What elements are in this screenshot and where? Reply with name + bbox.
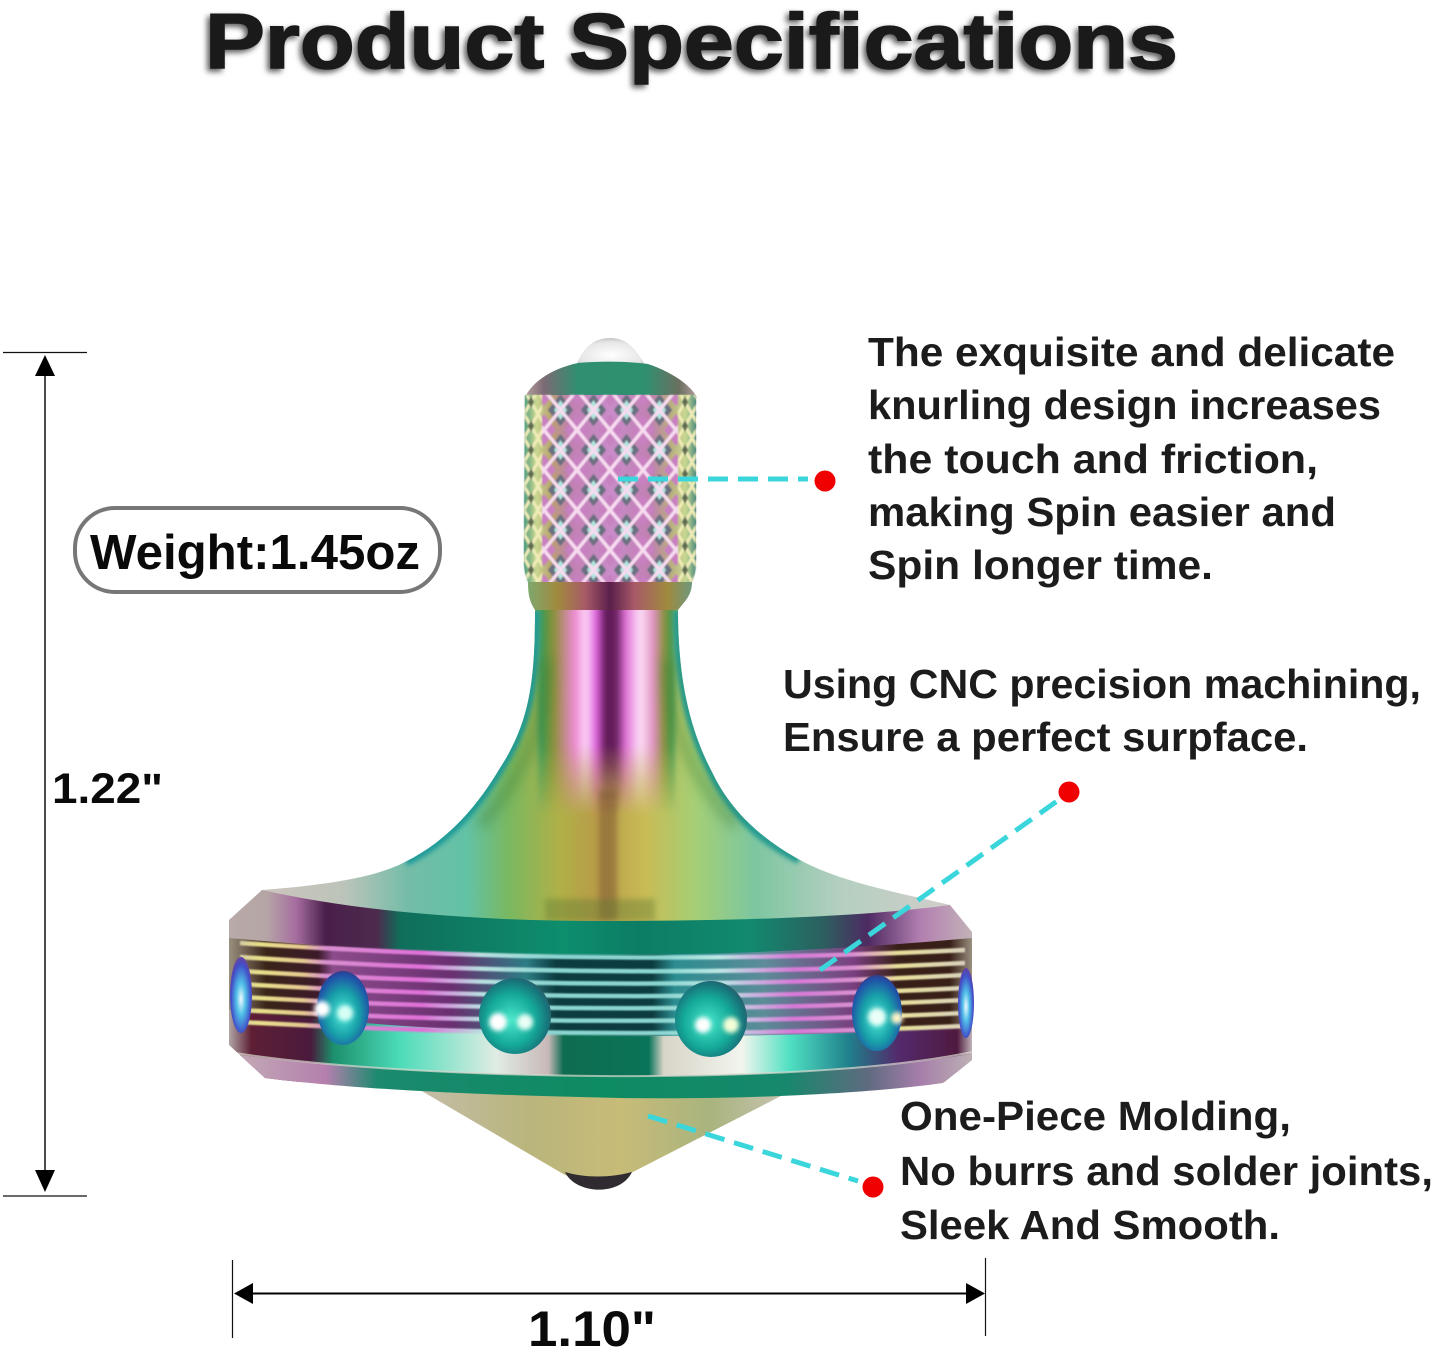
- ball bearings: [230, 957, 974, 1057]
- width dimension arrow: [232, 1258, 986, 1338]
- callout text: knurling: [868, 329, 1395, 588]
- lower cone: [420, 1090, 783, 1190]
- callout text: knurling: Spin longer time.: [868, 542, 1213, 588]
- bearing 5: [852, 975, 903, 1051]
- knurled grip: [524, 393, 696, 588]
- callout text: CNC machining: [783, 661, 1421, 760]
- weight pill: [75, 508, 440, 592]
- jewel tip: [576, 338, 646, 366]
- callout text: knurling: The exquisite and delicate: [868, 329, 1395, 375]
- bearing 2: [314, 971, 369, 1045]
- callout text: knurling: making Spin easier and: [868, 489, 1336, 535]
- callout text: CNC machining: Ensure a perfect surpface.: [783, 714, 1308, 760]
- callout text: CNC machining: Using CNC precision machining,: [783, 661, 1421, 707]
- callout text: knurling: knurling design increases: [868, 382, 1381, 428]
- bearing 6: [958, 968, 974, 1038]
- callout text: knurling: the touch and friction,: [868, 436, 1318, 482]
- height label: 1.22": [52, 765, 163, 813]
- height dimension arrow: [3, 352, 87, 1196]
- bearing 1: [230, 957, 252, 1033]
- callout leader: one-piece molding: [648, 1116, 884, 1198]
- spinning top illustration: [220, 338, 990, 1190]
- bearing 3: [479, 978, 551, 1054]
- grooves: [229, 938, 972, 1036]
- callout text: one-piece molding: Sleek And Smooth.: [900, 1202, 1280, 1248]
- callout text: one-piece molding: [900, 1093, 1433, 1248]
- body ring: [220, 885, 980, 1105]
- stem and flare: [261, 610, 950, 921]
- callout text: one-piece molding: One-Piece Molding,: [900, 1093, 1291, 1139]
- bearing 4: [675, 981, 747, 1057]
- callout text: one-piece molding: No burrs and solder joints,: [900, 1148, 1433, 1194]
- weight pill: Weight:1.45oz: [90, 526, 420, 580]
- cap: [525, 362, 697, 398]
- callout leader: CNC machining: [820, 782, 1080, 970]
- callout leader: knurling: [618, 470, 836, 492]
- collar: [528, 582, 692, 610]
